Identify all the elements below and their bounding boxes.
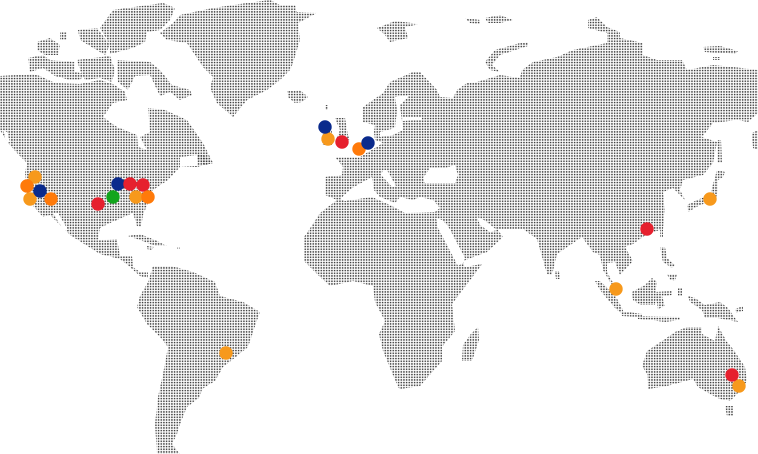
- landmass: islands of Europe and the Arctic Ocean: [287, 15, 738, 145]
- landmass: North and Central America: [0, 74, 213, 278]
- markers: Australia: [725, 368, 746, 393]
- landmass: Indonesia and New Guinea: [595, 278, 743, 322]
- water cut-outs: seas and gulfs: [3, 95, 497, 266]
- landmass: South America: [137, 266, 260, 454]
- landmass: Arctic islands: [28, 3, 192, 100]
- markers: western United States: [20, 170, 58, 206]
- marker: Singapore: [609, 282, 623, 296]
- landmass: Madagascar and Sri Lanka: [462, 271, 560, 361]
- landmass: Caribbean islands and Newfoundland: [128, 153, 213, 250]
- markers: central and eastern United States: [91, 177, 155, 211]
- marker: Japan: [703, 192, 717, 206]
- landmass: East Asia islands: [660, 130, 758, 281]
- marker: China: [640, 222, 654, 236]
- marker: Brazil: [219, 346, 233, 360]
- landmass: Australia and Tasmania: [642, 326, 747, 416]
- landmass: Greenland: [160, 0, 317, 117]
- landmass: Eurasia and Africa: [304, 17, 758, 389]
- location markers: [20, 120, 746, 393]
- markers: Europe: [318, 120, 375, 156]
